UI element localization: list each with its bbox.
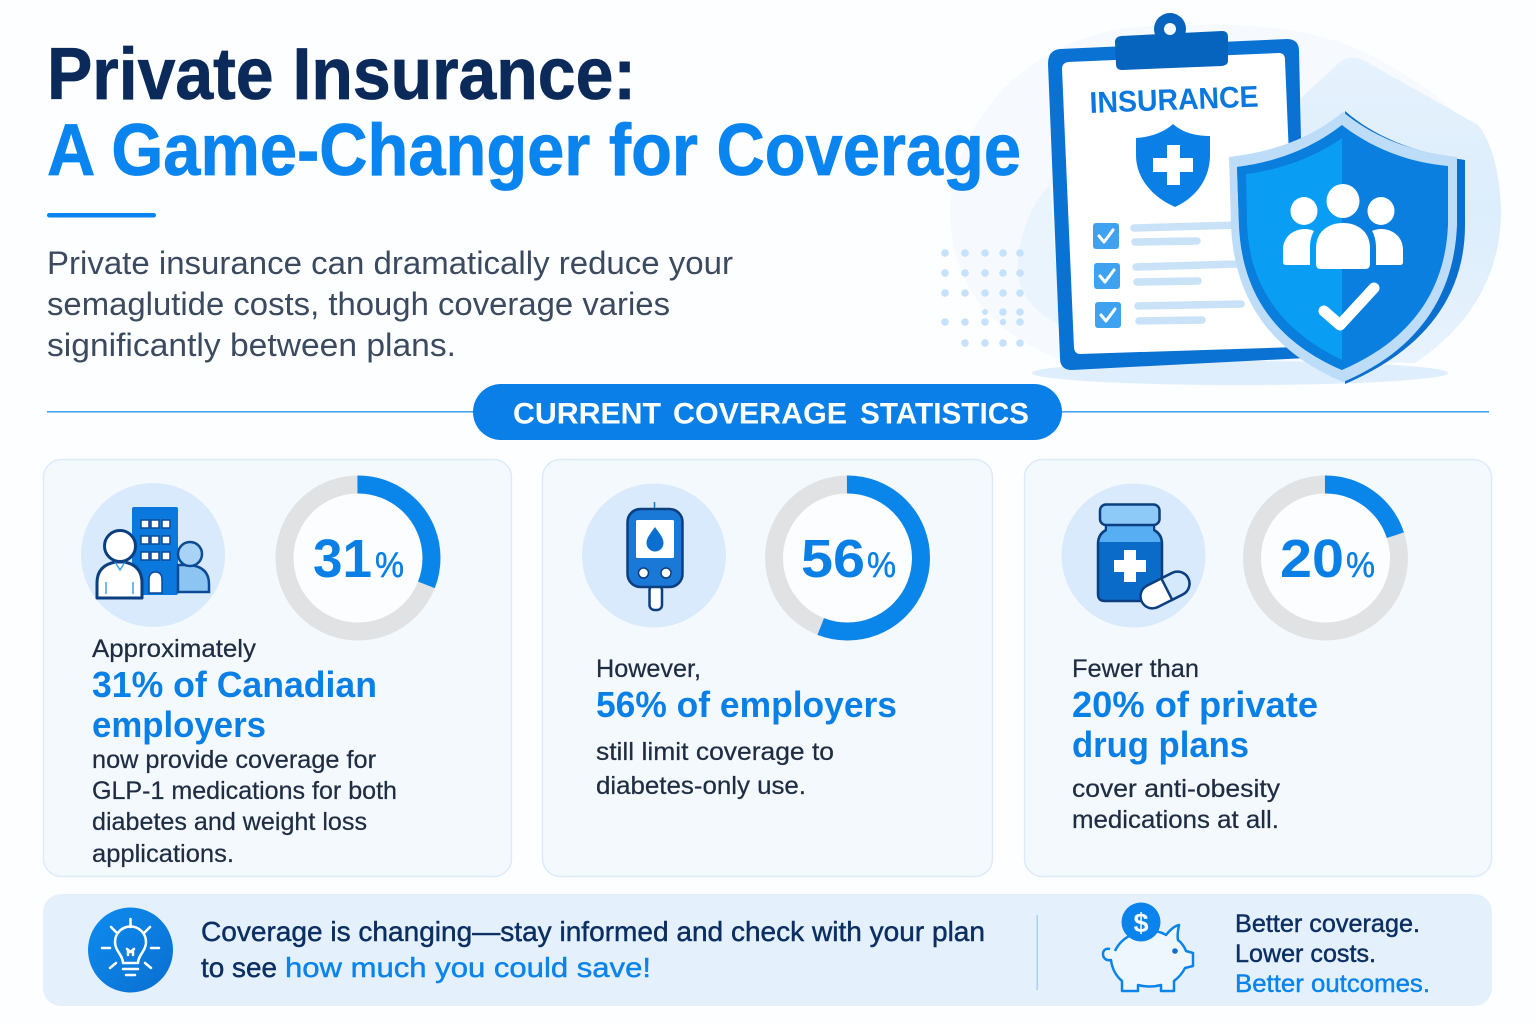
text block: 20%: medications at all. (1072, 806, 1279, 834)
text block: 56%: 56% of employers (596, 684, 897, 725)
donut chart: 56%: 56 (801, 529, 865, 589)
panel: 20% of private drug plans (1024, 460, 1492, 876)
slogan text: Lower costs. (1235, 940, 1376, 968)
callout text (201, 916, 985, 983)
donut chart: 31%: % (375, 546, 404, 585)
panel: bottom call to action (43, 894, 1492, 1006)
intro paragraph: Private insurance can dramatically reduce your (47, 245, 733, 281)
section heading banner (47, 384, 1489, 440)
slogan text (1235, 910, 1430, 998)
text block: 20%: drug plans (1072, 724, 1249, 765)
donut chart: 31% (284, 484, 432, 632)
panel: 31% of employers (44, 460, 512, 876)
icon: employees and office building (81, 483, 225, 627)
icon: piggy bank with coin (1103, 902, 1193, 991)
text block: 56%: diabetes-only use. (596, 772, 806, 800)
text block: 31% (92, 635, 397, 868)
clipboard (1048, 13, 1465, 384)
icon: light bulb (88, 908, 173, 992)
title: Private Insurance: (47, 34, 636, 115)
donut chart: 56% (774, 484, 921, 632)
section heading banner: CURRENT (513, 398, 661, 430)
text block: 20%: Fewer than (1072, 655, 1199, 683)
intro paragraph (47, 245, 733, 363)
people icon (1283, 184, 1403, 269)
text block: 31%: diabetes and weight loss (92, 808, 367, 836)
insurance label: INSURANCE (1089, 81, 1259, 120)
checklist (1093, 223, 1241, 328)
slogan text: Better outcomes. (1235, 970, 1430, 998)
donut chart: 31%: 31 (313, 529, 372, 589)
donut chart: 56%: % (867, 546, 896, 585)
title accent rule (47, 213, 156, 218)
title: A Game-Changer for Coverage (47, 110, 1021, 191)
text block: 31%: employers (92, 704, 266, 745)
text block: 56%: However, (596, 655, 701, 683)
text block: 31%: GLP-1 medications for both (92, 777, 397, 805)
section heading banner: STATISTICS (860, 398, 1029, 430)
icon: piggy bank with coin: $ (1133, 908, 1149, 938)
text block: 56% (596, 655, 897, 800)
text block: 20%: cover anti-obesity (1072, 775, 1281, 803)
intro paragraph: semaglutide costs, though coverage varies (47, 286, 670, 322)
donut chart: 20%: 20 (1280, 529, 1344, 589)
clip (1115, 31, 1228, 70)
background blobs (950, 25, 1501, 378)
text block: 20%: 20% of private (1072, 684, 1318, 725)
panel: 56% of employers (542, 460, 992, 876)
text block: 20% (1072, 655, 1318, 834)
callout text: Coverage is changing—stay informed and check with your plan (201, 916, 985, 947)
title (47, 34, 1021, 191)
intro paragraph: significantly between plans. (47, 327, 456, 363)
text block: 56%: still limit coverage to (596, 738, 834, 766)
donut chart: 20%: % (1346, 546, 1375, 585)
shield check mark (1324, 288, 1374, 325)
large shield (1229, 111, 1465, 384)
slogan text: Better coverage. (1235, 910, 1420, 938)
section heading banner: COVERAGE (673, 398, 847, 430)
donut chart: 20% (1252, 484, 1399, 632)
ground shadow (1032, 361, 1448, 385)
text block: 31%: applications. (92, 840, 234, 868)
small shield with cross (1136, 124, 1210, 207)
callout text: how much you could save! (285, 952, 651, 983)
text block: 31%: Approximately (92, 635, 257, 663)
text block: 31%: now provide coverage for (92, 746, 376, 774)
icon: medicine bottle and pill (1062, 484, 1206, 628)
callout text: to see (201, 952, 277, 983)
icon: glucose meter (582, 484, 726, 628)
decorative dots (941, 249, 1024, 347)
text block: 31%: 31% of Canadian (92, 664, 377, 705)
